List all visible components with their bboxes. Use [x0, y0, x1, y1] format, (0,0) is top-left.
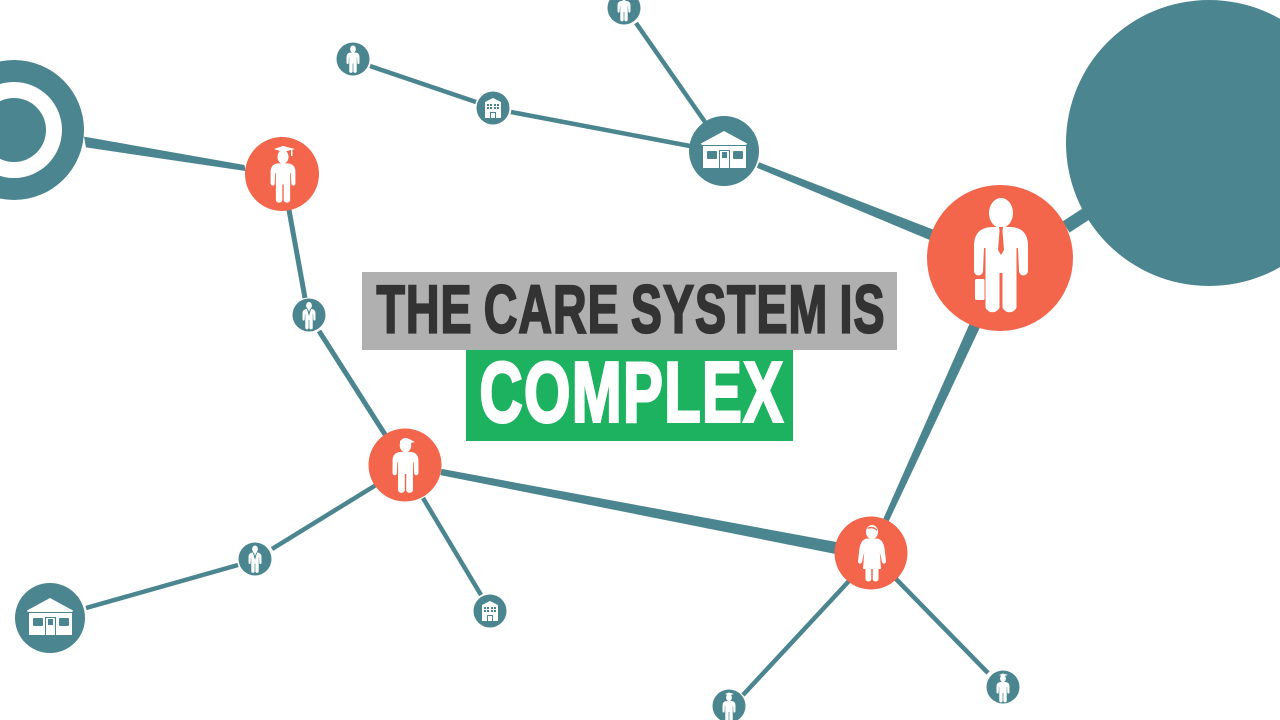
node: small graduate right	[986, 670, 1020, 704]
target ring	[0, 60, 84, 200]
node: small worker	[292, 298, 326, 332]
title: complex	[466, 346, 793, 441]
line: small person to house	[86, 565, 238, 608]
line: woman to bottom person	[743, 581, 849, 695]
line: ring to graduate	[84, 137, 245, 171]
line: child to building	[423, 498, 481, 595]
node: building bottom	[474, 594, 506, 628]
title: complex: COMPLEX	[480, 346, 784, 440]
line: house to businessman	[757, 162, 934, 240]
node: small person top	[608, 0, 640, 24]
node: businessman	[927, 185, 1073, 331]
node: house bottom left	[15, 583, 85, 653]
line: child to woman	[440, 469, 837, 554]
line: child to small person	[272, 485, 376, 549]
line: building to small person	[370, 66, 476, 102]
line: house to top person	[636, 23, 705, 122]
node: house top	[689, 116, 759, 186]
large teal circle	[1066, 0, 1280, 286]
node: small person lower left	[238, 542, 272, 576]
line: small worker to child	[319, 331, 386, 436]
network connector lines	[84, 23, 1086, 695]
node: building top	[476, 92, 510, 124]
line: graduate to small worker	[289, 210, 305, 298]
line: woman to businessman	[883, 323, 980, 521]
node: woman	[834, 516, 908, 590]
node: small graduate bottom	[712, 690, 746, 720]
line: woman to right person	[896, 579, 988, 673]
node: small person top left	[336, 42, 370, 76]
title: the care system is	[362, 272, 897, 350]
title: the care system is: THE CARE SYSTEM IS	[376, 272, 886, 348]
line: house to building	[511, 112, 690, 146]
line: businessman to large circle	[1066, 214, 1086, 227]
node: child with cap	[368, 428, 442, 502]
node: graduate	[245, 137, 319, 211]
